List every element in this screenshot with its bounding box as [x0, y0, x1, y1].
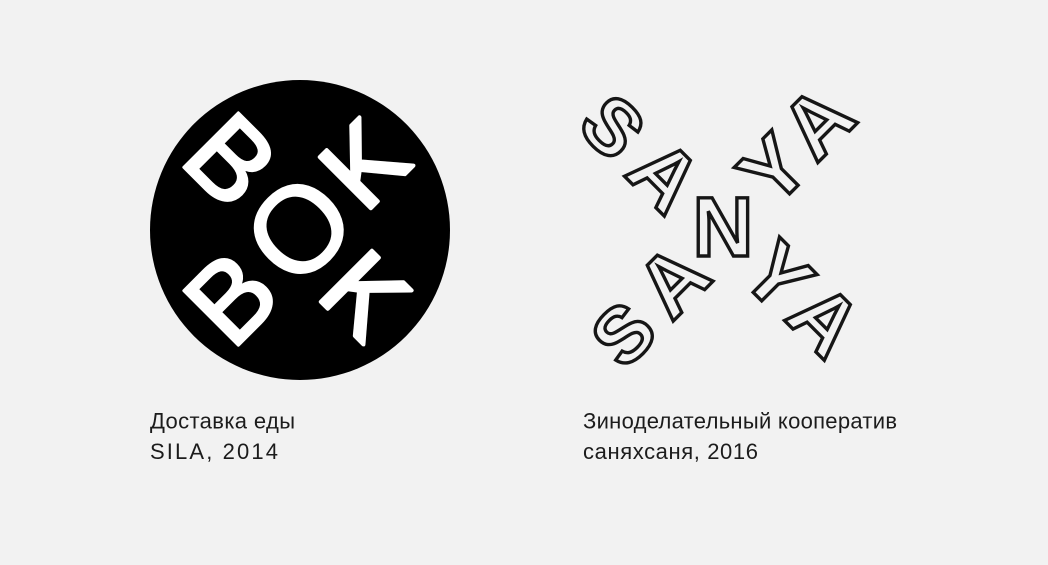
caption: wine cooperative	[583, 408, 897, 464]
shared centre letter N: N	[693, 180, 753, 274]
diagonal word: SANYA from bottom left: A	[763, 67, 872, 177]
caption: wine cooperative: Зиноделательный кооператив	[583, 408, 897, 434]
logo letters: B O K B O K: B	[160, 227, 302, 369]
diagonal word: SANYA from bottom left: Y	[720, 116, 826, 222]
diagonal word: SANYA from bottom left: A	[618, 226, 727, 335]
caption: food delivery: Доставка еды	[150, 408, 295, 434]
logo letters: B O K B O K: K	[299, 229, 431, 361]
logo background circle	[150, 80, 450, 380]
logo letters: B O K B O K	[160, 89, 431, 369]
panel: SANYA logo	[563, 67, 880, 384]
diagonal word: SANYA from top left: A	[610, 121, 720, 230]
diagonal word: SANYA from bottom left: S	[574, 284, 673, 384]
caption: food delivery	[150, 408, 295, 464]
logo letters: B O K B O K: B	[160, 89, 302, 231]
diagonal word: SANYA from top left	[563, 77, 880, 375]
diagonal word: SANYA from bottom left	[574, 67, 872, 384]
caption: food delivery: SILA, 2014	[150, 439, 278, 464]
diagonal word: SANYA from top left: A	[770, 265, 880, 375]
diagonal word: SANYA from top left: Y	[725, 223, 831, 329]
diagonal word: SANYA from top left: S	[563, 77, 662, 176]
panel: BOK logo	[150, 80, 450, 380]
logo letters: B O K B O K: O	[217, 147, 381, 311]
logo letters: B O K B O K: K	[298, 98, 430, 230]
caption: wine cooperative: саняхсаня, 2016	[583, 439, 758, 464]
